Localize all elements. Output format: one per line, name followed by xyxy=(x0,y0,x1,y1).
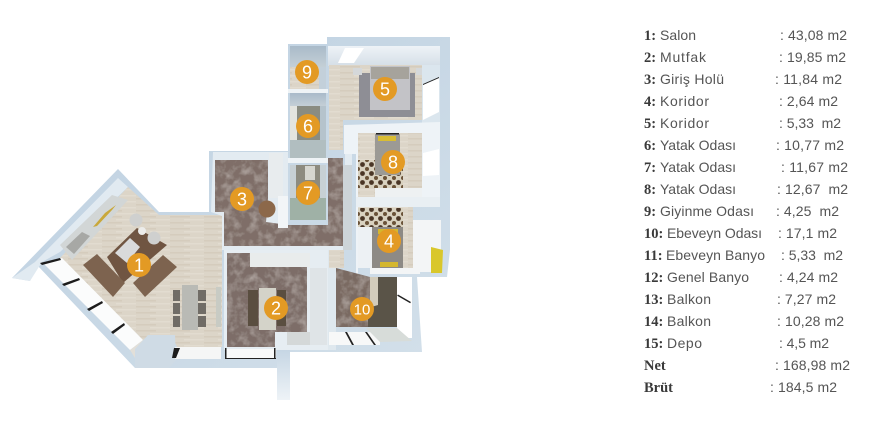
row 10: : 17,1 m2 xyxy=(778,225,837,241)
row 14: Balkon xyxy=(667,313,711,329)
row 10: 10: xyxy=(644,226,663,242)
net total: : 168,98 m2 xyxy=(775,357,850,373)
row 1: 1: xyxy=(644,28,656,44)
marker 9: 9 xyxy=(302,62,312,82)
floor plan xyxy=(12,37,450,400)
row 15 xyxy=(644,335,829,352)
row 6: 6: xyxy=(644,138,656,154)
row 7: Yatak Odası xyxy=(660,159,736,175)
row 11: Ebeveyn Banyo xyxy=(666,247,765,263)
row 14 xyxy=(644,313,844,330)
gross total: Brüt xyxy=(644,380,673,396)
row 11: 11: xyxy=(644,248,663,264)
marker 3 xyxy=(230,187,254,211)
row 12: 12: xyxy=(644,270,663,286)
room 2: mutfak xyxy=(224,250,328,359)
row 10 xyxy=(644,225,837,242)
row 3: Giriş Holü xyxy=(660,71,724,87)
row 4: Koridor xyxy=(660,93,709,109)
marker 9 xyxy=(295,60,319,84)
marker 10 xyxy=(350,297,374,321)
marker 8 xyxy=(381,150,405,174)
room 10: ebeveyn odası xyxy=(328,250,412,350)
row 5: Koridor xyxy=(660,115,709,131)
row 13 xyxy=(644,291,836,308)
row 8: : 12,67 m2 xyxy=(777,181,848,197)
net total xyxy=(644,357,850,374)
marker 1 xyxy=(127,253,151,277)
row 9: Giyinme Odası xyxy=(660,203,754,219)
room number markers xyxy=(127,60,405,321)
room 8: yatak odası xyxy=(344,122,440,200)
row 1: Salon xyxy=(660,27,696,43)
row 8 xyxy=(644,181,848,198)
row 2: : 19,85 m2 xyxy=(779,49,846,65)
row 4: : 2,64 m2 xyxy=(779,93,838,109)
row 1 xyxy=(644,27,847,44)
row 12: : 4,24 m2 xyxy=(779,269,838,285)
row 7: 7: xyxy=(644,160,656,176)
room 9: giyinme odası xyxy=(290,46,326,89)
gross total: : 184,5 m2 xyxy=(770,379,837,395)
row 2: 2: xyxy=(644,50,656,66)
outer walls xyxy=(12,37,450,400)
row 4: 4: xyxy=(644,94,656,110)
room 3: giriş holü xyxy=(211,152,352,250)
marker 8: 8 xyxy=(388,152,398,172)
row 14: 14: xyxy=(644,314,663,330)
row 9: 9: xyxy=(644,204,656,220)
room 1: salon xyxy=(40,187,222,368)
row 7 xyxy=(644,159,848,176)
marker 6 xyxy=(296,114,320,138)
marker 4: 4 xyxy=(384,232,394,252)
marker 3: 3 xyxy=(237,190,247,210)
marker 2: 2 xyxy=(271,298,281,318)
row 15: 15: xyxy=(644,336,663,352)
area legend xyxy=(644,27,850,396)
net total: Net xyxy=(644,358,666,374)
salon furniture: rug, sofas, tables xyxy=(83,214,221,330)
room 4: yatak odası xyxy=(356,197,443,275)
marker 5 xyxy=(373,77,397,101)
row 14: : 10,28 m2 xyxy=(777,313,844,329)
marker 7 xyxy=(296,181,320,205)
row 3: : 11,84 m2 xyxy=(775,71,842,87)
room 5: yatak odası xyxy=(328,46,440,150)
row 2 xyxy=(644,49,846,66)
marker 5: 5 xyxy=(380,80,390,100)
gross total xyxy=(644,379,837,396)
row 3 xyxy=(644,71,842,88)
row 9: : 4,25 m2 xyxy=(776,203,839,219)
row 11 xyxy=(644,247,843,264)
room 7: banyo xyxy=(288,158,328,220)
row 8: 8: xyxy=(644,182,656,198)
marker 2 xyxy=(264,296,288,320)
row 6: : 10,77 m2 xyxy=(776,137,844,153)
row 7: : 11,67 m2 xyxy=(781,159,848,175)
row 4 xyxy=(644,93,838,110)
room 6: banyo xyxy=(288,89,328,158)
row 5: 5: xyxy=(644,116,656,132)
row 9 xyxy=(644,203,839,220)
row 10: Ebeveyn Odası xyxy=(667,225,762,241)
row 13: Balkon xyxy=(667,291,711,307)
row 13: 13: xyxy=(644,292,663,308)
row 6 xyxy=(644,137,844,154)
row 15: : 4,5 m2 xyxy=(779,335,829,351)
marker 7: 7 xyxy=(303,184,313,204)
row 13: : 7,27 m2 xyxy=(777,291,836,307)
row 2: Mutfak xyxy=(660,49,707,65)
row 6: Yatak Odası xyxy=(660,137,736,153)
marker 4 xyxy=(377,229,401,253)
row 12 xyxy=(644,269,838,286)
row 5: : 5,33 m2 xyxy=(779,115,841,131)
row 12: Genel Banyo xyxy=(667,269,749,285)
marker 1: 1 xyxy=(134,256,144,276)
row 5 xyxy=(644,115,841,132)
row 11: : 5,33 m2 xyxy=(781,247,843,263)
row 15: Depo xyxy=(667,335,702,351)
marker 10: 10 xyxy=(354,302,370,318)
marker 6: 6 xyxy=(303,116,313,136)
row 3: 3: xyxy=(644,72,656,88)
row 8: Yatak Odası xyxy=(660,181,736,197)
row 1: : 43,08 m2 xyxy=(780,27,847,43)
